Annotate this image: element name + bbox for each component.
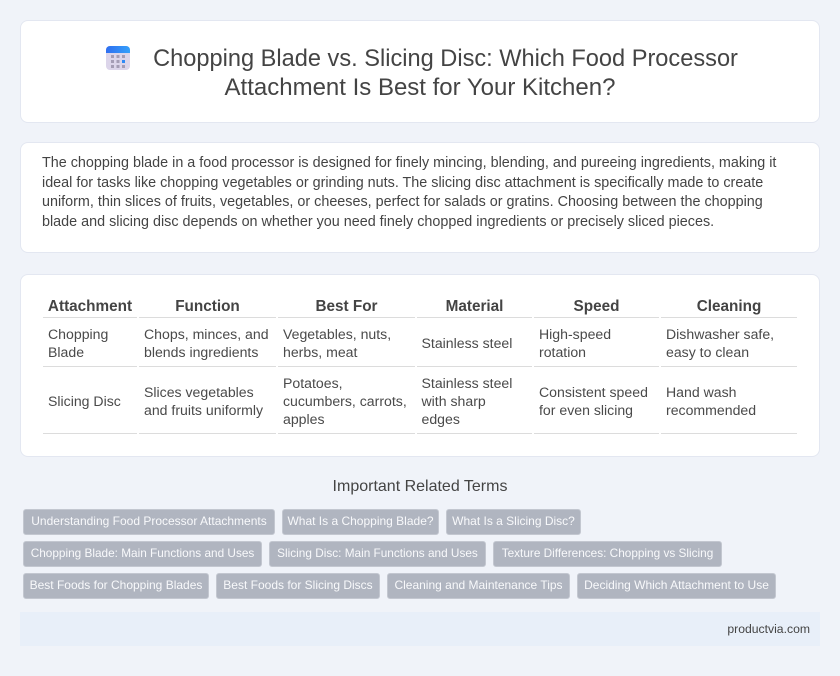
comparison table xyxy=(43,298,797,434)
panel: title header xyxy=(20,20,820,123)
table row: slicing disc: Consistent speed xyxy=(539,384,648,400)
icon: calendar xyxy=(106,46,130,70)
tag xyxy=(23,573,209,599)
tag: Best Foods for Chopping Blades xyxy=(30,578,202,592)
tag xyxy=(216,573,380,599)
tag: Chopping Blade: Main Functions and Uses xyxy=(31,546,254,560)
table row: slicing disc: with sharp xyxy=(422,393,486,409)
tag: Cleaning and Maintenance Tips xyxy=(394,578,563,592)
text block: intro paragraph: ideal for tasks like chopping vegetables or grinding nuts. The slicing disc attachment is specifically made to create xyxy=(42,174,763,190)
table row: chopping blade: Vegetables, nuts, xyxy=(283,326,391,342)
table row: chopping blade: Stainless steel xyxy=(422,335,512,351)
tag xyxy=(387,573,570,599)
text block: intro paragraph xyxy=(42,155,776,230)
table row: chopping blade: herbs, meat xyxy=(283,344,357,360)
table row: slicing disc: recommended xyxy=(666,402,756,418)
table row: slicing disc xyxy=(48,375,756,427)
tag xyxy=(446,509,581,535)
tag: Understanding Food Processor Attachments xyxy=(31,514,267,528)
tag xyxy=(577,573,776,599)
tag xyxy=(493,541,722,567)
tag xyxy=(23,541,262,567)
tag xyxy=(23,509,275,535)
table row: chopping blade: easy to clean xyxy=(666,344,749,360)
table row: slicing disc: and fruits uniformly xyxy=(144,402,263,418)
table header row xyxy=(48,298,761,315)
panel: intro text xyxy=(20,142,820,253)
tag xyxy=(282,509,439,535)
tag: Texture Differences: Chopping vs Slicing xyxy=(502,546,713,560)
tag: Deciding Which Attachment to Use xyxy=(584,578,769,592)
table row: chopping blade: Chopping xyxy=(48,326,108,342)
table row: slicing disc: apples xyxy=(283,411,325,427)
table row: chopping blade: blends ingredients xyxy=(144,344,258,360)
title: Chopping Blade vs. Slicing Disc: Which Food Processor xyxy=(153,46,738,72)
table row: chopping blade: High-speed xyxy=(539,326,611,342)
table header row: Attachment xyxy=(48,298,132,315)
table row: slicing disc: Slices vegetables xyxy=(144,384,254,400)
table row: slicing disc: Stainless steel xyxy=(422,375,512,391)
footer source: productvia.com xyxy=(727,622,810,636)
related term tags xyxy=(23,509,776,599)
table row: chopping blade: Blade xyxy=(48,344,84,360)
table header row: Speed xyxy=(574,298,619,315)
title: Attachment Is Best for Your Kitchen? xyxy=(225,74,615,101)
panel: comparison table xyxy=(20,274,820,457)
text block: intro paragraph: blade and slicing disc depends on whether you need finely chopped ingredients or precisely sliced pieces. xyxy=(42,214,714,230)
table row: slicing disc: for even slicing xyxy=(539,402,633,418)
tag: What Is a Slicing Disc? xyxy=(452,514,575,528)
table row: chopping blade xyxy=(48,326,774,360)
table row: chopping blade: rotation xyxy=(539,344,586,360)
table header row: Material xyxy=(446,298,503,315)
table row: slicing disc: Potatoes, xyxy=(283,375,343,391)
tag: Best Foods for Slicing Discs xyxy=(223,578,373,592)
footer bar xyxy=(20,612,820,646)
table row: slicing disc: Slicing Disc xyxy=(48,393,121,409)
table header row: Cleaning xyxy=(697,298,761,315)
table row: chopping blade: Chops, minces, and xyxy=(144,326,269,342)
title xyxy=(153,46,738,101)
table row: slicing disc: Hand wash xyxy=(666,384,737,400)
text block: intro paragraph: uniform, thin slices of fruits, vegetables, or cheeses, perfect for salads or gratins. Choosing between the chopping xyxy=(42,194,763,210)
tag: Slicing Disc: Main Functions and Uses xyxy=(277,546,478,560)
tag: What Is a Chopping Blade? xyxy=(287,514,434,528)
heading: important related terms: Important Related Terms xyxy=(333,478,507,495)
tag xyxy=(269,541,486,567)
table row: chopping blade: Dishwasher safe, xyxy=(666,326,774,342)
table row: slicing disc: edges xyxy=(422,411,460,427)
table header row: Best For xyxy=(315,298,378,315)
text block: intro paragraph: The chopping blade in a food processor is designed for finely mincing, blending, and pureeing ingredients, making it xyxy=(42,155,776,171)
table header row: Function xyxy=(175,298,240,315)
table row: slicing disc: cucumbers, carrots, xyxy=(283,393,407,409)
